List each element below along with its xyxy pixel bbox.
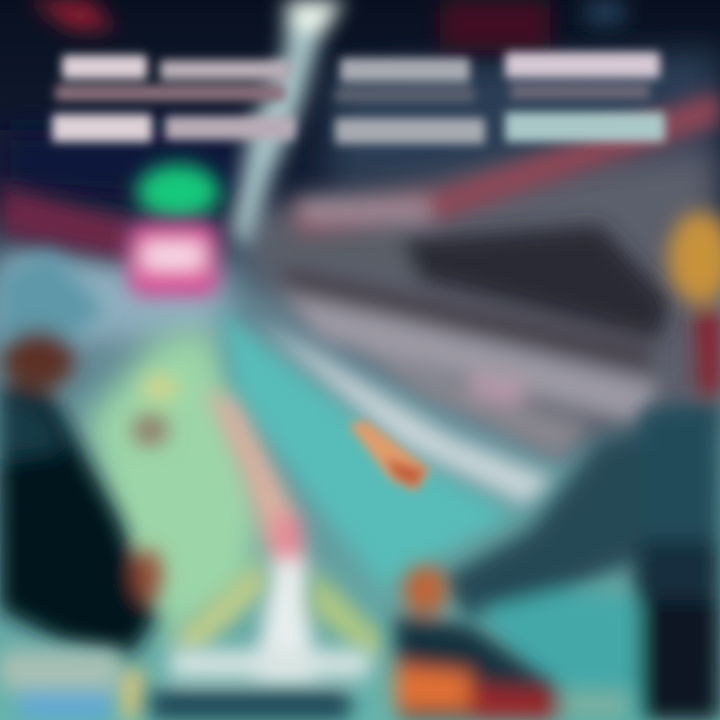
white track edge	[255, 320, 555, 505]
pink badge	[128, 222, 218, 296]
top accents	[30, 0, 625, 50]
teal track	[220, 310, 515, 590]
right figure	[440, 212, 720, 720]
left maroon band	[0, 185, 130, 260]
race car on field	[132, 376, 178, 446]
green badge	[136, 164, 220, 220]
title centre lines	[335, 58, 485, 144]
stand tiers	[265, 225, 670, 460]
yellow-green stripes	[115, 560, 385, 720]
left figure	[0, 250, 162, 655]
light beam	[232, 0, 345, 250]
gloved hand orange	[395, 566, 630, 720]
stands backdrop	[0, 50, 720, 450]
title text blocks	[52, 52, 665, 144]
race car on track	[348, 420, 430, 492]
green field	[85, 330, 265, 640]
red-white center line	[205, 390, 315, 680]
red stand band	[290, 90, 720, 235]
title left lines	[52, 55, 295, 142]
bottom left corner	[0, 650, 370, 720]
title right lines	[505, 52, 665, 142]
